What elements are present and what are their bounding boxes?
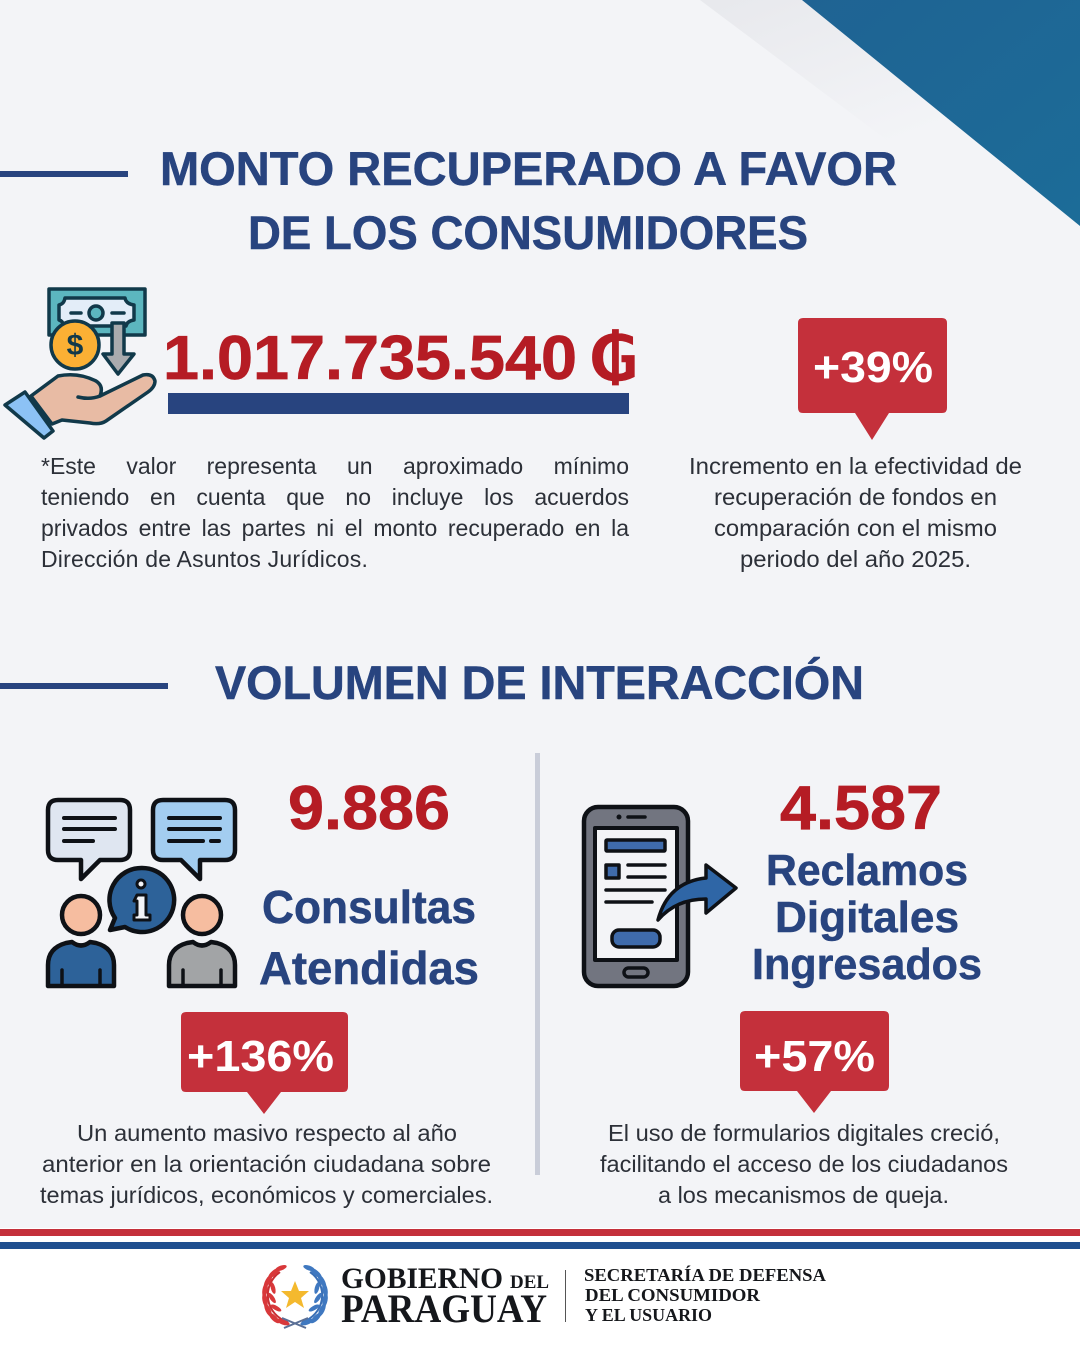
- logo: secretaria name: Y EL USUARIO: [585, 1305, 712, 1325]
- icon: hand receiving money: $: [67, 329, 84, 362]
- stat: reclamos: Ingresados: [752, 940, 982, 989]
- text: efectividad increase: Incremento en la efectividad de: [689, 453, 1022, 479]
- text: consultas description: [40, 1120, 493, 1208]
- icon: people with speech bubbles: [48, 800, 235, 986]
- stat: consultas: Atendidas: [259, 942, 479, 994]
- text: amount footnote: teniendo en cuenta que no incluye los acuerdos: [41, 484, 629, 510]
- callout: +136%: [181, 1012, 348, 1114]
- logo: secretaria name: SECRETARÍA DE DEFENSA: [584, 1264, 826, 1285]
- heading: monto recuperado: [0, 142, 897, 259]
- logo: gobierno del paraguay wordmark: DEL: [510, 1272, 549, 1293]
- logo: gobierno del paraguay wordmark: PARAGUAY: [341, 1286, 547, 1331]
- callout: +39%: +39%: [813, 343, 933, 392]
- big number: amount recovered: ₲: [589, 322, 638, 395]
- logo: gobierno del paraguay wordmark: [341, 1262, 549, 1331]
- callout: +57%: [740, 1011, 889, 1113]
- big number: amount recovered: [163, 322, 638, 414]
- text: reclamos description: facilitando el acceso de los ciudadanos: [600, 1151, 1008, 1177]
- decorative corner: blue triangle: [802, 0, 1080, 226]
- text: consultas description: Un aumento masivo respecto al año: [77, 1120, 457, 1146]
- stat: reclamos: Reclamos: [766, 846, 968, 895]
- stat: reclamos: Digitales: [775, 893, 959, 942]
- text: efectividad increase: [689, 453, 1022, 572]
- text: reclamos description: [600, 1120, 1008, 1208]
- text: amount footnote: Dirección de Asuntos Jurídicos.: [41, 546, 368, 572]
- column divider: [535, 753, 540, 1175]
- text: reclamos description: a los mecanismos de queja.: [658, 1182, 949, 1208]
- text: amount footnote: *Este valor representa un aproximado mínimo: [41, 453, 629, 479]
- logo: national emblem: [261, 1264, 329, 1328]
- heading: volumen de interaccion: VOLUMEN DE INTERACCIÓN: [215, 656, 864, 709]
- text: efectividad increase: comparación con el mismo: [714, 515, 997, 541]
- text: reclamos description: El uso de formularios digitales creció,: [608, 1120, 1000, 1146]
- text: consultas description: anterior en la orientación ciudadana sobre: [42, 1151, 491, 1177]
- stat: consultas: Consultas: [262, 881, 476, 933]
- text: efectividad increase: periodo del año 2025.: [740, 546, 971, 572]
- callout: +136%: +136%: [187, 1032, 334, 1081]
- stat: consultas: [259, 774, 479, 994]
- stat: reclamos: [752, 774, 982, 989]
- callout: +39%: [798, 318, 947, 440]
- logo: gobierno del paraguay wordmark: GOBIERNO: [341, 1262, 503, 1295]
- icon: hand receiving money: [5, 289, 155, 438]
- text: amount footnote: [41, 453, 630, 572]
- text: consultas description: temas jurídicos, económicos y comerciales.: [40, 1182, 493, 1208]
- icon: phone with arrow: [584, 807, 736, 986]
- stat: reclamos: 4.587: [780, 774, 942, 843]
- logo: secretaria name: [584, 1264, 826, 1325]
- text: efectividad increase: recuperación de fondos en: [714, 484, 997, 510]
- decorative corner: grey band: [700, 0, 1000, 161]
- stat: consultas: 9.886: [288, 774, 450, 843]
- heading: monto recuperado: MONTO RECUPERADO A FAVOR: [160, 142, 897, 195]
- text: amount footnote: privados entre las partes ni el monto recuperado en la: [41, 515, 629, 541]
- logo: secretaria name: DEL CONSUMIDOR: [585, 1285, 761, 1305]
- heading: monto recuperado: DE LOS CONSUMIDORES: [248, 206, 808, 259]
- footer band with flag stripes: [0, 1228, 1080, 1350]
- callout: +57%: +57%: [754, 1032, 875, 1081]
- big number: amount recovered: 1.017.735.540: [163, 324, 577, 393]
